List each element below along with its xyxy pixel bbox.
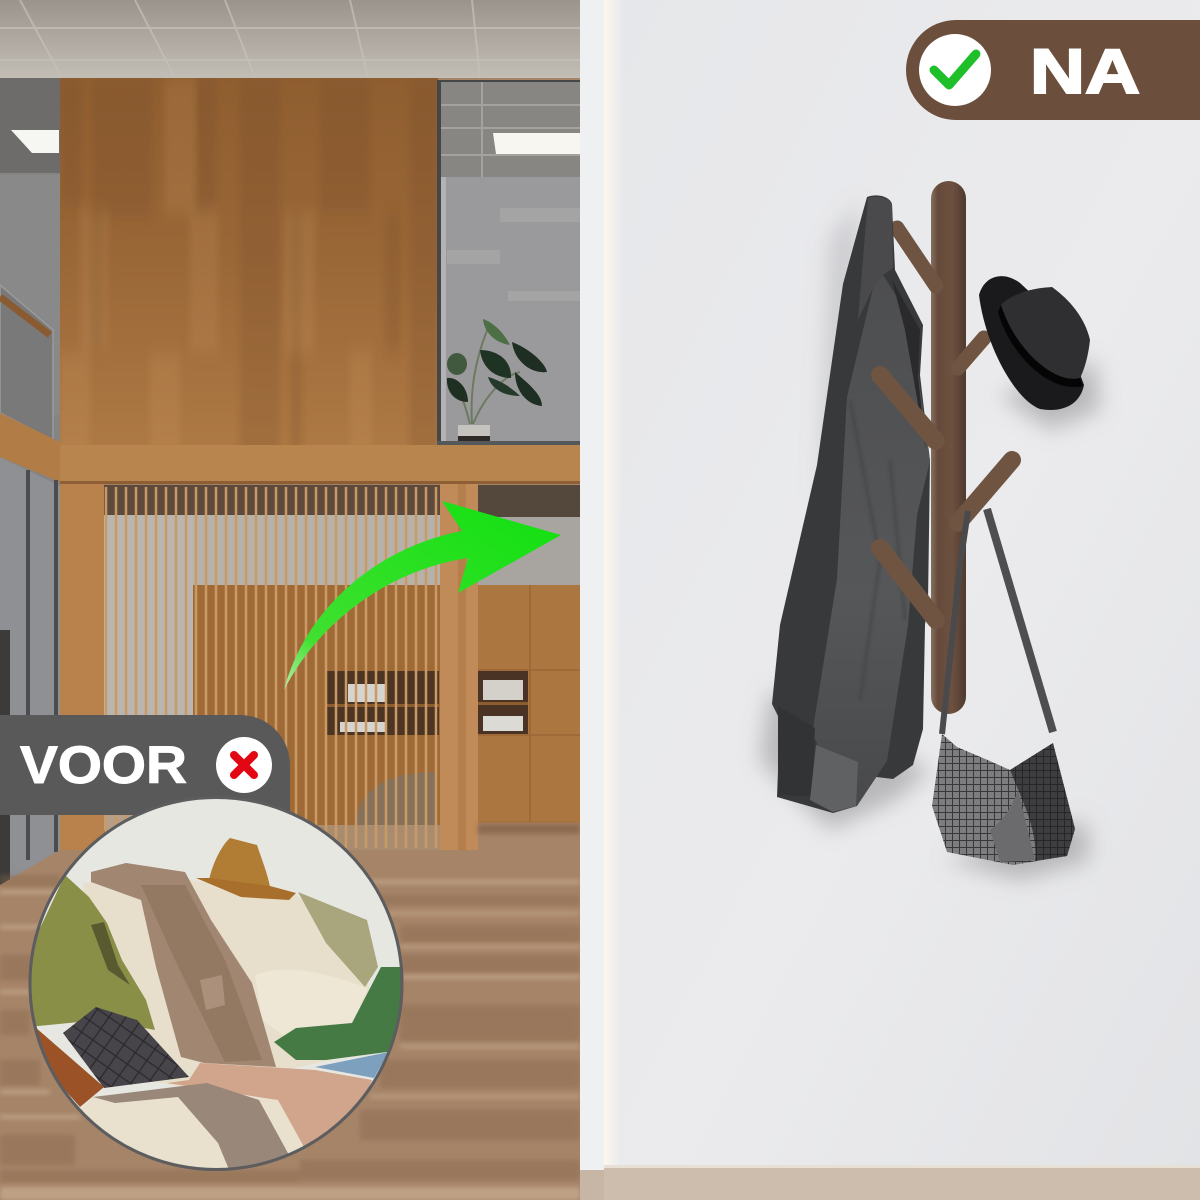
olive sweater <box>25 875 155 1030</box>
olive jacket <box>298 892 378 987</box>
wooden floor <box>0 823 580 1200</box>
callout: messy sofa photo <box>28 799 404 1171</box>
shelf niche <box>327 671 439 735</box>
brown bag <box>35 1027 104 1107</box>
white column <box>580 0 604 1170</box>
blanket peach <box>167 1063 372 1147</box>
icon: wooden rack pole <box>931 181 966 714</box>
arrow: green before to after <box>284 501 561 690</box>
left grey corridor <box>0 78 60 885</box>
upper right window <box>437 80 580 445</box>
icon: middle left peg <box>880 375 936 441</box>
icon: top left peg <box>897 228 936 286</box>
icon: green check <box>919 34 991 106</box>
blanket cream <box>81 1094 304 1168</box>
panel: after wall scene <box>580 0 1200 1200</box>
tall wood wall <box>60 78 438 483</box>
icon: dark coat <box>772 195 930 813</box>
right alcove <box>478 485 580 823</box>
wooden slats <box>106 487 436 848</box>
wall <box>604 0 1200 1165</box>
icon: potted plant <box>447 319 547 441</box>
label: NA: NA <box>1030 37 1140 107</box>
tan hat <box>196 838 296 900</box>
icon: lower left peg <box>880 548 936 620</box>
wood band <box>60 445 580 482</box>
lower room behind slats <box>104 485 440 830</box>
shadows <box>760 200 1100 880</box>
blanket taupe <box>93 1083 289 1172</box>
coat rack with items <box>760 181 1100 880</box>
lounge chair <box>357 772 435 825</box>
icon: red cross <box>216 737 272 793</box>
cream sofa <box>83 880 370 1090</box>
panel: before interior scene <box>0 0 580 1200</box>
icon: hat peg <box>958 338 984 368</box>
badge: VOOR <box>0 715 290 815</box>
icon: black hat <box>979 276 1090 410</box>
ceiling <box>0 0 580 78</box>
taupe coat <box>91 863 276 1067</box>
icon: lower right peg <box>958 460 1012 523</box>
wood pillars <box>60 484 478 850</box>
badge: NA <box>906 20 1200 120</box>
green shirt <box>274 967 402 1060</box>
label: VOOR: VOOR <box>20 736 187 795</box>
quilted black bag <box>63 1007 189 1088</box>
denim <box>315 1052 389 1078</box>
icon: handbag with strap <box>932 509 1075 865</box>
floor strip <box>604 1165 1200 1200</box>
